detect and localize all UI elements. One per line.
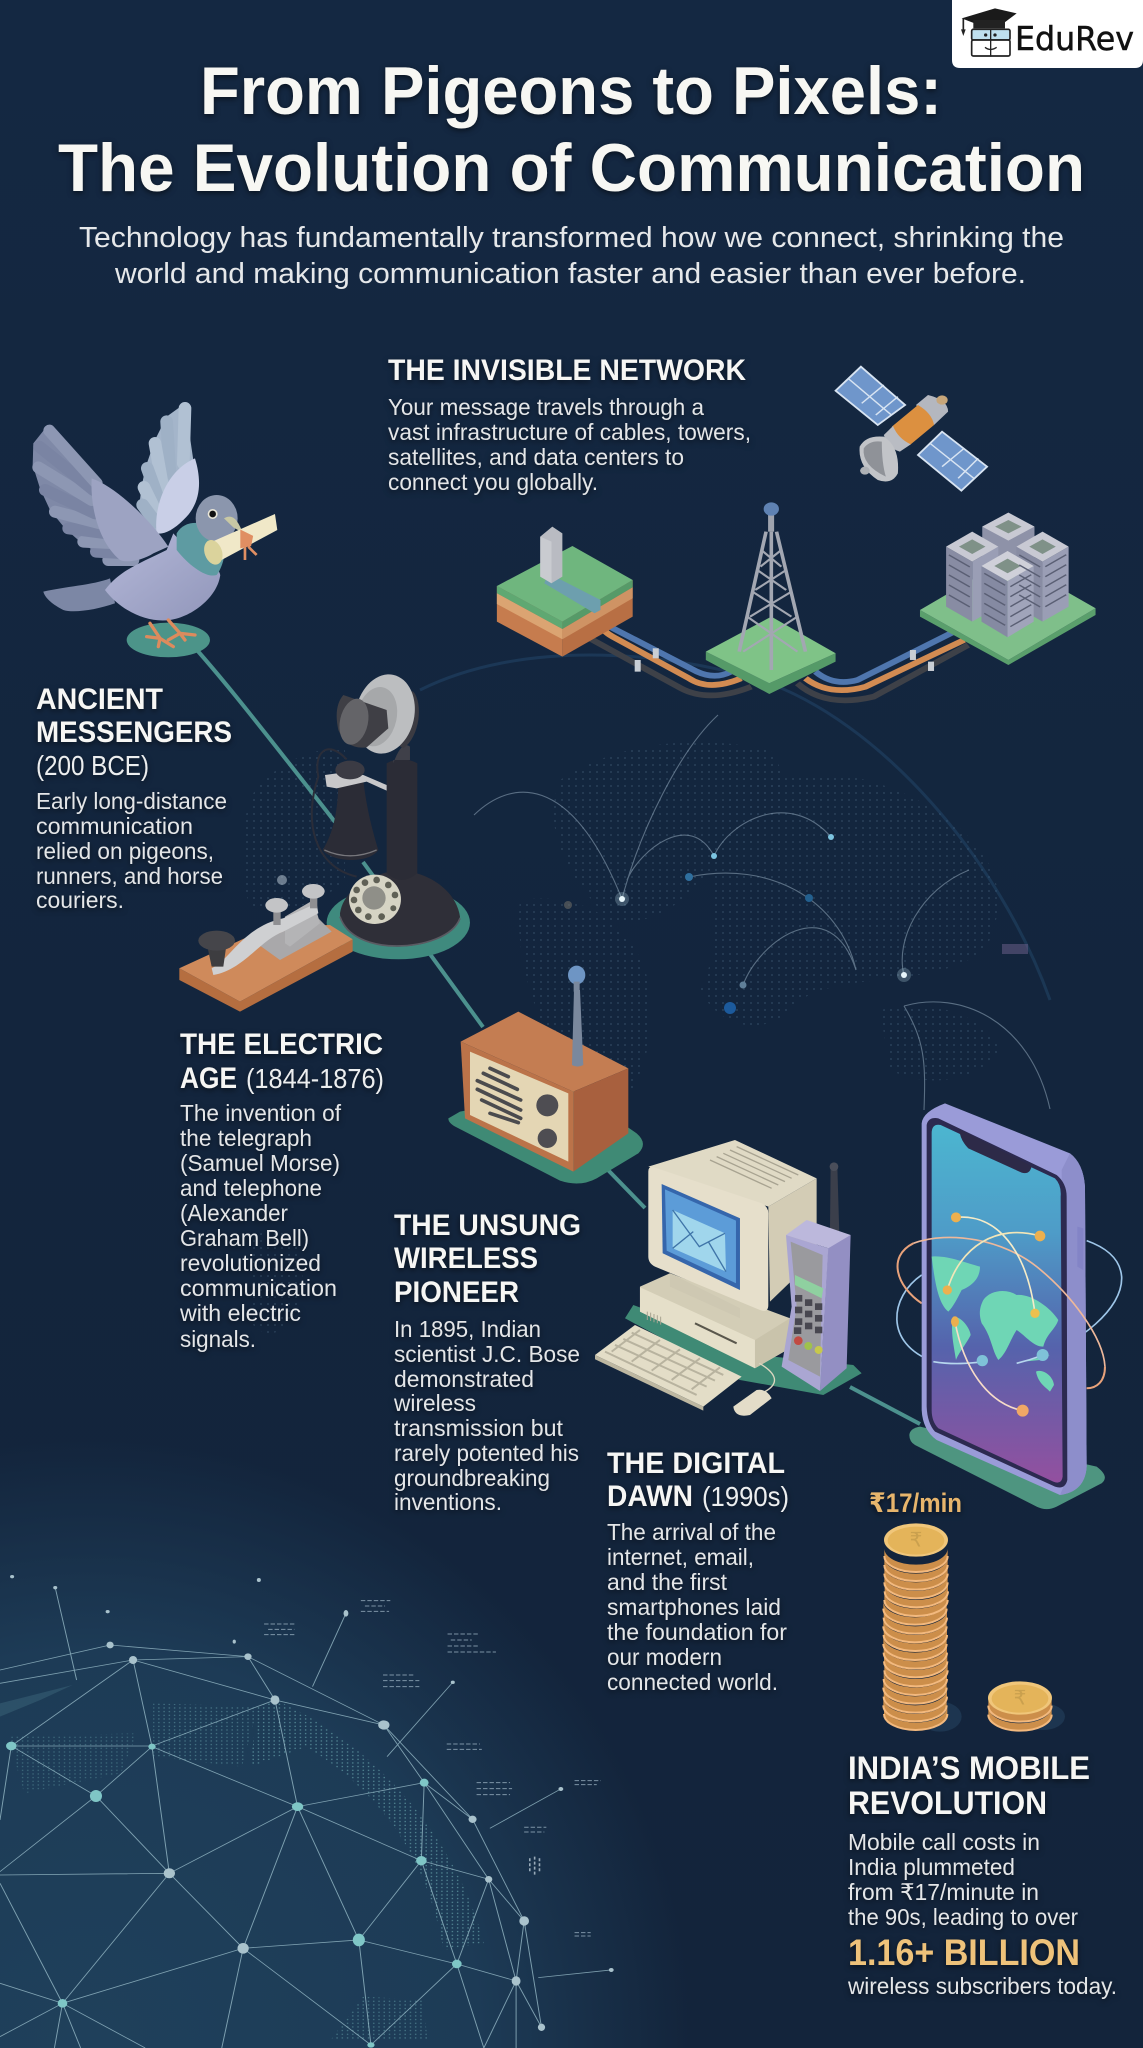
panel: india's mobile revolution xyxy=(847,1750,1117,1999)
text: ancient messengers body: Early long-distance xyxy=(36,788,227,814)
text: electric age body: (Samuel Morse) xyxy=(180,1150,340,1176)
icon: short coin stack xyxy=(988,1681,1052,1731)
text: wireless pioneer body: inventions. xyxy=(394,1489,502,1515)
text: wireless pioneer body xyxy=(393,1316,580,1515)
icon: monitor xyxy=(648,1140,817,1318)
icon: short coin stack: ₹ xyxy=(1014,1688,1026,1710)
panel: the digital dawn: (1990s) xyxy=(702,1481,789,1512)
text: mobile revolution body xyxy=(848,1829,1078,1930)
icon: mouse xyxy=(733,1363,774,1416)
text: wireless pioneer body: In 1895, Indian xyxy=(394,1316,541,1342)
panel: the digital dawn: THE DIGITAL xyxy=(607,1447,785,1480)
panel: the unsung wireless pioneer xyxy=(393,1209,581,1515)
title: The Evolution of Communication xyxy=(58,130,1085,206)
background: dotted world map with connection arcs xyxy=(241,655,1050,1333)
text: digital dawn body xyxy=(607,1519,787,1695)
icon: graduation cap mascot xyxy=(961,8,1017,57)
text: invisible network body: Your message travels through a xyxy=(388,394,704,420)
panel: ancient messengers: ANCIENT xyxy=(36,683,163,716)
icon: candlestick telephone and telegraph key xyxy=(179,669,470,1012)
text: mobile revolution body: from ₹17/minute in xyxy=(848,1879,1039,1905)
panel: ancient messengers: (200 BCE) xyxy=(36,750,149,781)
text: invisible network body: vast infrastructure of cables, towers, xyxy=(388,419,751,445)
icon: tall coin stack: ₹ xyxy=(910,1530,922,1552)
panel: the unsung wireless pioneer: THE UNSUNG xyxy=(394,1209,581,1242)
text: mobile revolution body: Mobile call costs in xyxy=(848,1829,1040,1855)
panel: india's mobile revolution: REVOLUTION xyxy=(848,1785,1047,1821)
text: wireless subscribers: wireless subscribers today. xyxy=(847,1973,1117,1999)
panel: ancient messengers xyxy=(36,683,232,913)
text: wireless pioneer body: demonstrated xyxy=(394,1366,534,1392)
icon: radio antenna xyxy=(568,966,585,1067)
icon: retro computer and brick phone xyxy=(595,1140,862,1416)
panel: the unsung wireless pioneer: WIRELESS xyxy=(394,1242,538,1275)
text: wireless pioneer body: groundbreaking xyxy=(394,1465,550,1491)
text: digital dawn body: our modern xyxy=(607,1644,722,1670)
panel: the electric age: (1844-1876) xyxy=(246,1063,384,1094)
text: wireless pioneer body: wireless xyxy=(393,1390,476,1416)
panel: the digital dawn: DAWN xyxy=(607,1480,693,1513)
text: digital dawn body: the foundation for xyxy=(607,1619,787,1645)
subtitle: Technology has fundamentally transformed how we connect, shrinking the xyxy=(79,222,1064,254)
panel: the digital dawn xyxy=(607,1447,789,1695)
icon: world map on screen xyxy=(932,1256,1058,1392)
logo: EduRev xyxy=(952,0,1143,68)
icon: smartphone with globe xyxy=(897,1103,1122,1509)
text: electric age body xyxy=(179,1100,342,1352)
text: invisible network body: connect you globally. xyxy=(388,469,598,495)
text: electric age body: The invention of xyxy=(180,1100,342,1126)
icon: telegraph key xyxy=(179,884,353,1012)
icon: network infrastructure xyxy=(497,502,1096,700)
text: ancient messengers body: runners, and horse xyxy=(36,863,223,889)
text: wireless pioneer body: rarely potented his xyxy=(394,1440,579,1466)
panel: ancient messengers: MESSENGERS xyxy=(36,716,232,749)
icon: data center xyxy=(920,513,1096,665)
text: mobile revolution body: the 90s, leading to over xyxy=(848,1904,1078,1930)
text: electric age body: signals. xyxy=(180,1326,256,1352)
text: digital dawn body: The arrival of the xyxy=(607,1519,776,1545)
icon: ground block xyxy=(497,527,633,657)
text: digital dawn body: connected world. xyxy=(607,1669,778,1695)
label: ₹17/min: ₹17/min xyxy=(869,1488,962,1518)
panel: the invisible network: THE INVISIBLE NETWORK xyxy=(388,354,746,387)
panel: the unsung wireless pioneer: PIONEER xyxy=(394,1276,519,1309)
text: electric age body: and telephone xyxy=(180,1175,322,1201)
icon: tall coin stack xyxy=(883,1523,948,1730)
panel: the electric age: AGE xyxy=(180,1062,237,1095)
icon: keyboard xyxy=(595,1325,742,1411)
panel: india's mobile revolution: INDIA’S MOBILE xyxy=(848,1750,1090,1786)
text: ancient messengers body xyxy=(36,788,227,913)
text: electric age body: communication xyxy=(180,1275,337,1301)
text: ancient messengers body: relied on pigeons, xyxy=(36,838,214,864)
icon: desktop case xyxy=(640,1273,790,1368)
panel: the invisible network xyxy=(388,354,751,495)
text: invisible network body xyxy=(388,394,751,495)
title xyxy=(58,53,1085,206)
icon: vintage radio xyxy=(448,966,643,1183)
icon: pigeon with scroll xyxy=(33,403,277,657)
logo: EduRev: EduRev xyxy=(1015,19,1134,58)
text: electric age body: (Alexander xyxy=(180,1200,288,1226)
timeline connector line xyxy=(188,640,920,1424)
icon: coin stacks xyxy=(883,1523,1065,1732)
subtitle xyxy=(79,222,1064,290)
text: ancient messengers body: communication xyxy=(36,813,193,839)
panel: the electric age xyxy=(179,1028,384,1352)
text: electric age body: Graham Bell) xyxy=(180,1225,309,1251)
icon: orbit arcs with endpoints xyxy=(913,1217,1105,1411)
icon: brick phone xyxy=(782,1162,851,1391)
text: electric age body: the telegraph xyxy=(180,1125,312,1151)
icon: cables xyxy=(580,608,968,700)
icon: satellite xyxy=(836,367,987,491)
text: invisible network body: satellites, and data centers to xyxy=(388,444,684,470)
text: electric age body: revolutionized xyxy=(180,1250,321,1276)
background: wireframe globe xyxy=(0,1440,690,2048)
icon: cell tower xyxy=(706,502,836,694)
text: electric age body: with electric xyxy=(179,1300,301,1326)
text: digital dawn body: internet, email, xyxy=(607,1544,754,1570)
title: From Pigeons to Pixels: xyxy=(200,53,942,129)
text: digital dawn body: and the first xyxy=(607,1569,728,1595)
statistic: 1.16+ billion: 1.16+ BILLION xyxy=(848,1932,1080,1973)
text: wireless pioneer body: transmission but xyxy=(394,1415,564,1441)
text: mobile revolution body: India plummeted xyxy=(848,1854,1015,1880)
text: digital dawn body: smartphones laid xyxy=(607,1594,781,1620)
text: ancient messengers body: couriers. xyxy=(36,887,124,913)
panel: the electric age: THE ELECTRIC xyxy=(180,1028,383,1061)
text: wireless pioneer body: scientist J.C. Bose xyxy=(394,1341,580,1367)
subtitle: world and making communication faster and easier than ever before. xyxy=(114,258,1026,290)
